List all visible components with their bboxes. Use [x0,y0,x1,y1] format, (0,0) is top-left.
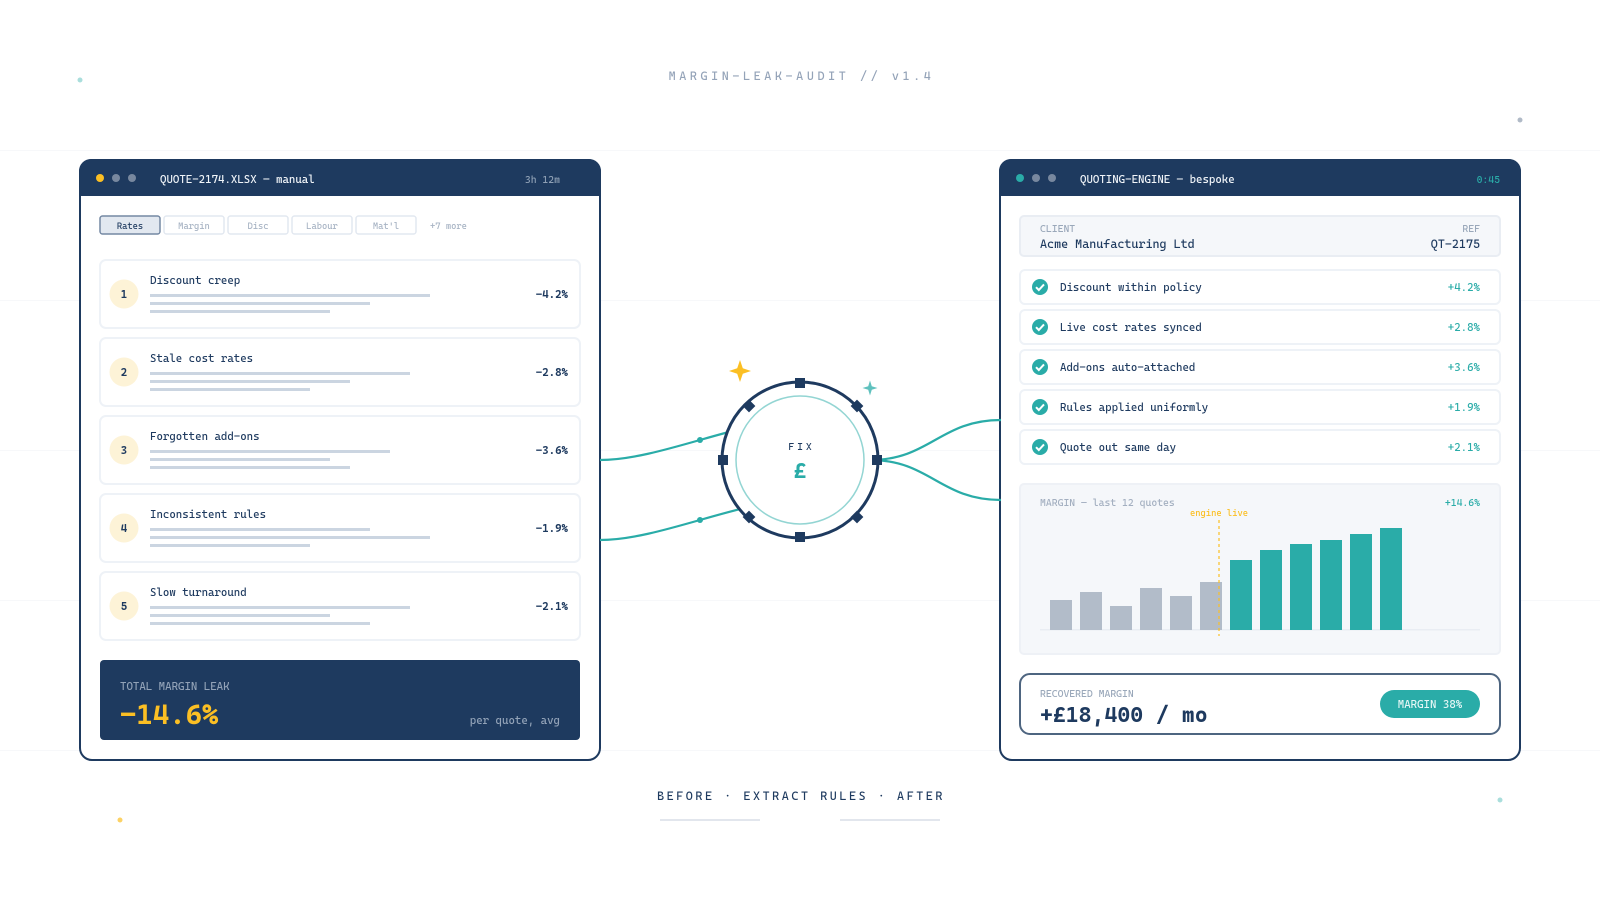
client info bar: Acme Manufacturing Ltd [1040,237,1195,251]
client info bar [1020,216,1500,256]
fix hub: FIX [788,442,815,453]
client info bar: QT-2175 [1431,237,1480,251]
panel header: bespoke [999,159,1521,196]
check row 4 [1020,390,1500,424]
tab strip: Disc [247,222,269,232]
leak row 3: Forgotten add-ons [150,430,260,443]
check row 2: +2.8% [1448,321,1481,334]
check row 3: +3.6% [1448,361,1481,374]
panel header: manual: 3h 12m [525,175,560,186]
leak row 2 [100,338,580,406]
check row 2: Live cost rates synced [1060,321,1202,334]
total margin leak callout: −14.6% [120,698,219,731]
check row 4: +1.9% [1448,401,1481,414]
decorative dot: bottom left [118,818,122,822]
check row 5: Quote out same day [1060,441,1176,454]
decorative dot: bottom right [1498,798,1502,802]
leak row 4: −1.9% [536,522,569,535]
connector: hub out to engine panel [870,420,1001,500]
panel header: bespoke: QUOTING-ENGINE — bespoke [1080,173,1235,186]
leak row 4: Inconsistent rules [150,508,266,521]
leak row 5: −2.1% [536,600,569,613]
leak row 1: −4.2% [536,288,569,301]
recovered margin callout: MARGIN 38% [1398,698,1463,711]
tab strip [100,216,467,234]
fix hub [718,378,882,542]
recovered margin callout: RECOVERED MARGIN [1040,689,1134,700]
total margin leak callout [100,660,580,740]
leak row 5 [100,572,580,640]
check row 3: Add-ons auto-attached [1060,361,1195,374]
check row 2 [1020,310,1500,344]
leak row 5: Slow turnaround [150,586,247,599]
tab strip: Rates [117,222,143,232]
fix hub: £ [794,459,807,484]
check row 1: Discount within policy [1060,281,1202,294]
leak row 2: 2 [121,366,127,379]
leak row 2: Stale cost rates [150,352,253,365]
leak row 3: 3 [121,444,127,457]
leak row 3 [100,416,580,484]
recovered margin callout: +£18,400 / mo [1040,703,1208,728]
footer caption: BEFORE · EXTRACT RULES · AFTER [657,789,945,803]
leak row 5: 5 [121,600,127,613]
check row 5: +2.1% [1448,441,1481,454]
check row 5 [1020,430,1500,464]
bar chart: margin over last 12 quotes: engine live [1190,509,1248,519]
decorative dot: top right [1518,118,1522,122]
bar chart: margin over last 12 quotes [1020,484,1500,654]
leak row 1: 1 [121,288,127,301]
icon: teal sparkle [862,380,878,396]
panel: manual quote spreadsheet [79,159,601,760]
bar chart: margin over last 12 quotes: MARGIN — last 12 quotes [1040,498,1175,509]
decorative dot: top left [78,78,82,82]
panel header: manual [79,159,601,196]
leak row 4 [100,494,580,562]
tab strip: Labour [306,222,339,232]
tab strip: Mat'l [373,222,399,232]
recovered margin callout [1020,674,1500,734]
leak row 2: −2.8% [536,366,569,379]
check row 1: +4.2% [1448,281,1481,294]
title: MARGIN-LEAK-AUDIT // v1.4 [669,69,934,83]
leak row 1: Discount creep [150,274,240,287]
panel header: manual: QUOTE-2174.XLSX — manual [160,173,315,186]
connector: left inputs into fix hub [600,420,800,540]
check row 1 [1020,270,1500,304]
check row 3 [1020,350,1500,384]
panel: bespoke quoting engine [999,159,1521,760]
client info bar: CLIENT [1040,224,1075,235]
client info bar: REF [1462,224,1480,235]
tab strip: +7 more [430,222,467,232]
panel header: bespoke: 0:45 [1477,175,1500,186]
leak row 1 [100,260,580,328]
icon: gold sparkle [729,360,751,382]
tab strip: Margin [178,222,210,232]
leak row 3: −3.6% [536,444,569,457]
total margin leak callout: per quote, avg [470,714,560,727]
leak row 4: 4 [121,522,128,535]
check row 4: Rules applied uniformly [1060,401,1208,414]
bar chart: margin over last 12 quotes: +14.6% [1445,498,1480,509]
total margin leak callout: TOTAL MARGIN LEAK [120,680,230,693]
